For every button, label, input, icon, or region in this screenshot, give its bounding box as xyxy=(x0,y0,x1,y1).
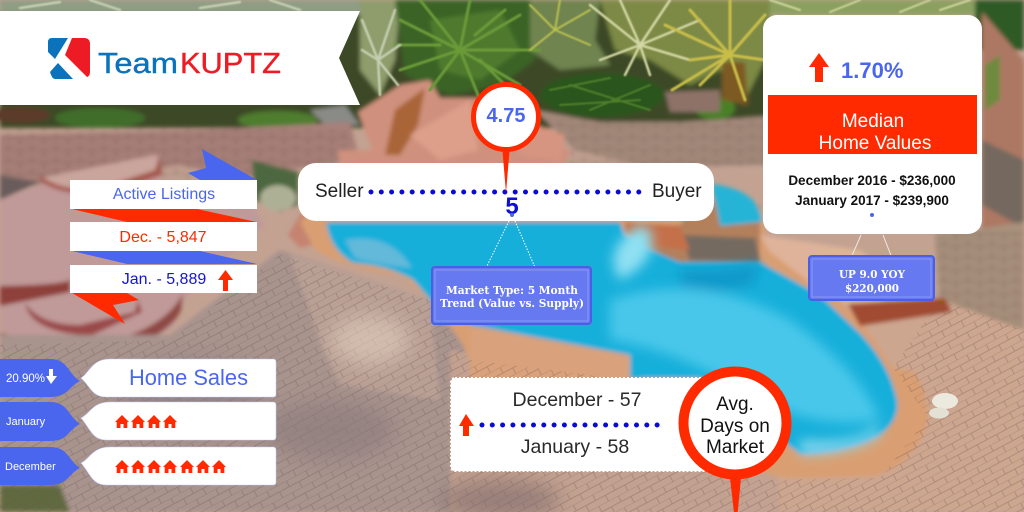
home value figures: January 2017 - $239,900 xyxy=(795,193,949,208)
row: sales change: 20.90% xyxy=(6,373,45,385)
heading band: Median xyxy=(842,111,904,132)
icon: TeamKUPTZ logo mark xyxy=(48,38,90,79)
map pin: avg days on market: Avg. xyxy=(716,394,754,415)
heading band: Home Values xyxy=(819,133,931,154)
home value figures: December 2016 - $236,000 xyxy=(788,173,956,188)
home value figures xyxy=(788,173,956,217)
callout: year over year: UP 9.0 YOY xyxy=(839,267,906,281)
callout: market type xyxy=(432,221,591,324)
panel: seller buyer market scale: 5 xyxy=(505,193,519,220)
logo wordmark: Team xyxy=(98,48,178,80)
map pin: avg days on market: Market xyxy=(706,437,765,458)
icon: up arrow xyxy=(459,414,474,436)
icon: up arrow xyxy=(809,53,829,82)
row: january sales: January xyxy=(6,416,46,428)
panel: active listings xyxy=(70,149,257,324)
row: sales change: Home Sales xyxy=(129,365,248,390)
map pin: market score xyxy=(474,84,538,193)
row: sales change xyxy=(0,359,276,397)
heading band xyxy=(768,95,977,154)
panel: seller buyer market scale: Seller xyxy=(315,181,364,202)
logo banner xyxy=(0,11,360,105)
logo wordmark xyxy=(98,48,281,80)
panel: average days on market xyxy=(451,378,711,471)
callout: year over year: $220,000 xyxy=(845,281,899,295)
december listings: Dec. - 5,847 xyxy=(119,229,207,246)
map pin: market score: 4.75 xyxy=(487,105,525,127)
percent change: 1.70% xyxy=(841,58,903,83)
panel: home sales xyxy=(0,359,276,485)
icon: up arrow xyxy=(218,270,233,291)
row: december sales xyxy=(0,447,276,485)
heading: active listings: Active Listings xyxy=(113,186,215,203)
map pin: avg days on market xyxy=(684,372,786,512)
callout: market type: Trend (Value vs. Supply) xyxy=(440,296,584,310)
january listings: Jan. - 5,889 xyxy=(122,271,206,288)
panel: average days on market: January - 58 xyxy=(521,436,629,458)
row: december sales: December xyxy=(5,461,56,473)
row: january sales xyxy=(0,402,276,441)
callout: market type: Market Type: 5 Month xyxy=(446,283,579,297)
logo wordmark: KUPTZ xyxy=(180,48,281,80)
panel: seller buyer market scale: Buyer xyxy=(652,181,702,202)
map pin: avg days on market: Days on xyxy=(700,416,770,437)
callout: year over year xyxy=(809,235,934,300)
panel: median home values xyxy=(763,15,982,234)
panel: seller buyer market scale xyxy=(298,163,714,221)
panel: average days on market: December - 57 xyxy=(513,389,641,411)
